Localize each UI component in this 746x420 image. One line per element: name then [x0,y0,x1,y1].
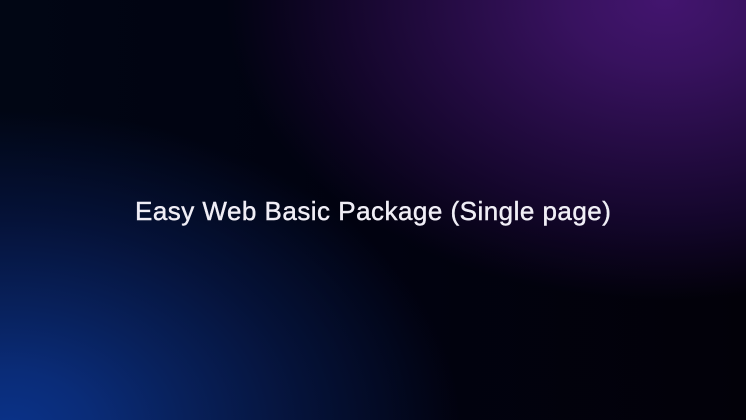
title: Easy Web Basic Package (Single page) [135,196,611,226]
